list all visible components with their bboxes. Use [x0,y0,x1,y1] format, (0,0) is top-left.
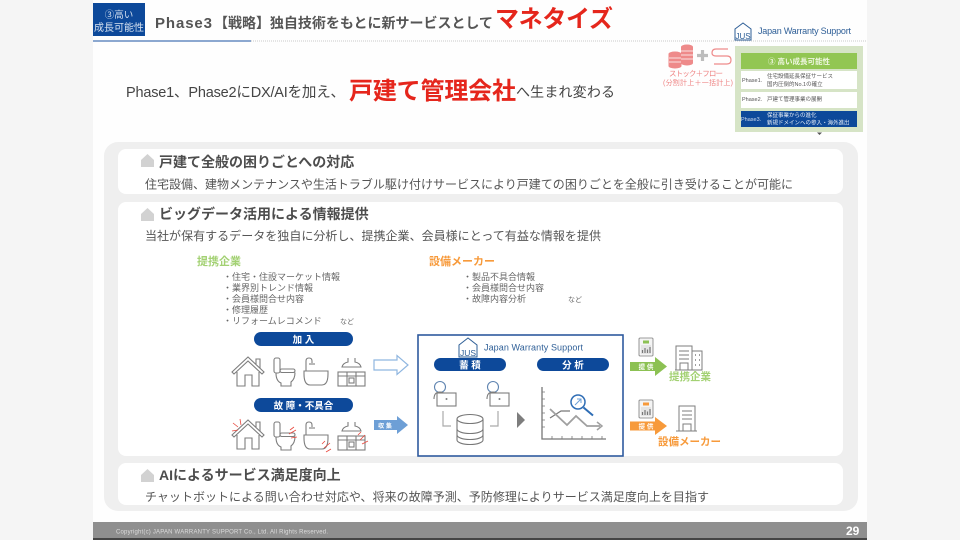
partner company list: ・業界別トレンド情報 [223,282,313,293]
equipment maker list: 設備メーカー [429,254,495,268]
title: マネタイズ [495,5,613,33]
icon: report [639,400,653,418]
card: big data [118,202,843,456]
equipment maker list: ・製品不具合情報 [463,271,535,282]
icons: home equipment [232,357,365,386]
phase 3 row: 保証事業からの進化 [767,111,817,119]
partner company list: ・リフォームレコメンド [223,316,322,326]
phase 2 row [741,92,857,108]
equipment maker list: など [568,296,582,304]
icon: house marker [141,154,154,167]
pill: enrolment: 加 入 [293,334,315,346]
header rule [93,40,867,42]
icons: operators [434,382,509,406]
card: AI service [118,463,843,505]
pill: failure [254,398,353,412]
icon: house marker [141,208,154,221]
heading: ビッグデータ活用による情報提供 [159,206,369,222]
icon: office buildings [675,346,702,370]
title: Phase3 [155,15,212,32]
title [155,5,613,33]
subtitle: Phase1、Phase2にDX/AIを加え、 [126,84,345,101]
pill: analyse: 分 析 [562,360,584,372]
body text: 当社が保有するデータを独自に分析し、提携企業、会員様にとって有益な情報を提供 [145,228,601,243]
logo: Japan Warranty Support [484,342,583,352]
logo: Japan Warranty Support [735,23,851,41]
logo: JUS [460,348,476,358]
heading: 戸建て全般の困りごとへの対応 [159,154,354,170]
pill: analyse [537,358,609,372]
footer: 29 [846,524,860,538]
equipment maker list [429,254,582,304]
pill: failure: 故 障・不具合 [274,400,334,412]
phase 3 row [741,111,857,127]
pill: accumulate: 蓄 積 [459,360,481,372]
phase 1 row: 国内圧倒的No.1の確立 [767,80,823,88]
body text: チャットボットによる問い合わせ対応や、将来の故障予測、予防修理によりサービス満足度向上を目指す [145,489,709,504]
label: 設備メーカー [658,435,721,448]
subtitle: 戸建て管理会社 [349,78,516,105]
stock plus flow caption [663,69,733,87]
panel: phase navigator [735,46,863,132]
arrow: provide: 提 供 [639,362,654,371]
card: detached house support [118,149,843,194]
stock plus flow caption: ストック＋フロー [669,69,723,78]
arrow: collection: 収 集 [378,422,392,430]
section badge: ③高い [105,9,133,21]
arrow: enrolment data [374,356,408,374]
pill: enrolment [254,332,353,346]
phase 1 row [741,71,857,89]
phase 1 row: 住宅設備延長保証サービス [767,72,833,80]
chart: analysis [542,387,606,439]
arrow: collection [374,416,408,434]
arrow: process [517,412,525,428]
partner company list: ・会員様問合せ内容 [223,293,304,304]
subtitle: へ生まれ変わる [516,84,615,100]
logo: Japan Warranty Support: Japan Warranty Support [758,26,851,36]
icons: faulty home equipment [232,419,368,452]
panel: JWS data box [418,335,623,456]
phase 3 row: Phase3. [741,117,762,123]
label: 提携企業 [669,370,711,383]
navigator heading: ③ 高い成長可能性 [768,56,831,66]
section badge: 成長可能性 [94,21,144,34]
phase 1 row: Phase1. [742,78,763,84]
phase 2 row: 戸建て管理事業の展開 [767,95,823,103]
partner company list: ・住宅・住設マーケット情報 [223,271,340,282]
pill: accumulate [434,358,506,372]
icon: magnifier [571,395,593,416]
icon: database [457,414,483,444]
flow lines [443,411,498,426]
body text: 住宅設備、建物メンテナンスや生活トラブル駆け付けサービスにより戸建ての困りごとを全般に引き受けることが可能に [145,176,793,192]
phase 2 row: Phase2. [742,97,763,103]
icon: house marker [141,469,154,482]
partner company list [197,254,354,326]
icon: factory building [676,406,697,431]
partner company output [630,338,711,383]
stock plus flow caption: (分割計上＋一括計上) [663,78,733,87]
equipment maker output [630,400,721,448]
partner company list: 提携企業 [197,254,241,268]
subtitle [126,78,615,105]
arrow: provide: 提 供 [639,422,654,430]
logo: Japan Warranty Support: JUS [735,32,751,41]
outer panel [104,142,858,511]
logo [459,338,583,358]
footer [93,522,867,540]
icon: stock plus flow [668,44,731,68]
partner company list: など [340,318,354,326]
section badge [93,3,145,36]
heading: AIによるサービス満足度向上 [159,467,341,483]
icon: report [639,338,653,356]
footer: Copyright(c) JAPAN WARRANTY SUPPORT Co., Ltd. All Rights Reserved. [116,530,328,536]
equipment maker list: ・故障内容分析 [463,293,526,304]
title: 【戦略】独自技術をもとに新サービスとして [214,15,493,31]
equipment maker list: ・会員様問合せ内容 [463,282,544,293]
partner company list: ・修理履歴 [223,304,268,315]
phase 3 row: 新規ドメインへの参入・海外進出 [767,118,850,126]
